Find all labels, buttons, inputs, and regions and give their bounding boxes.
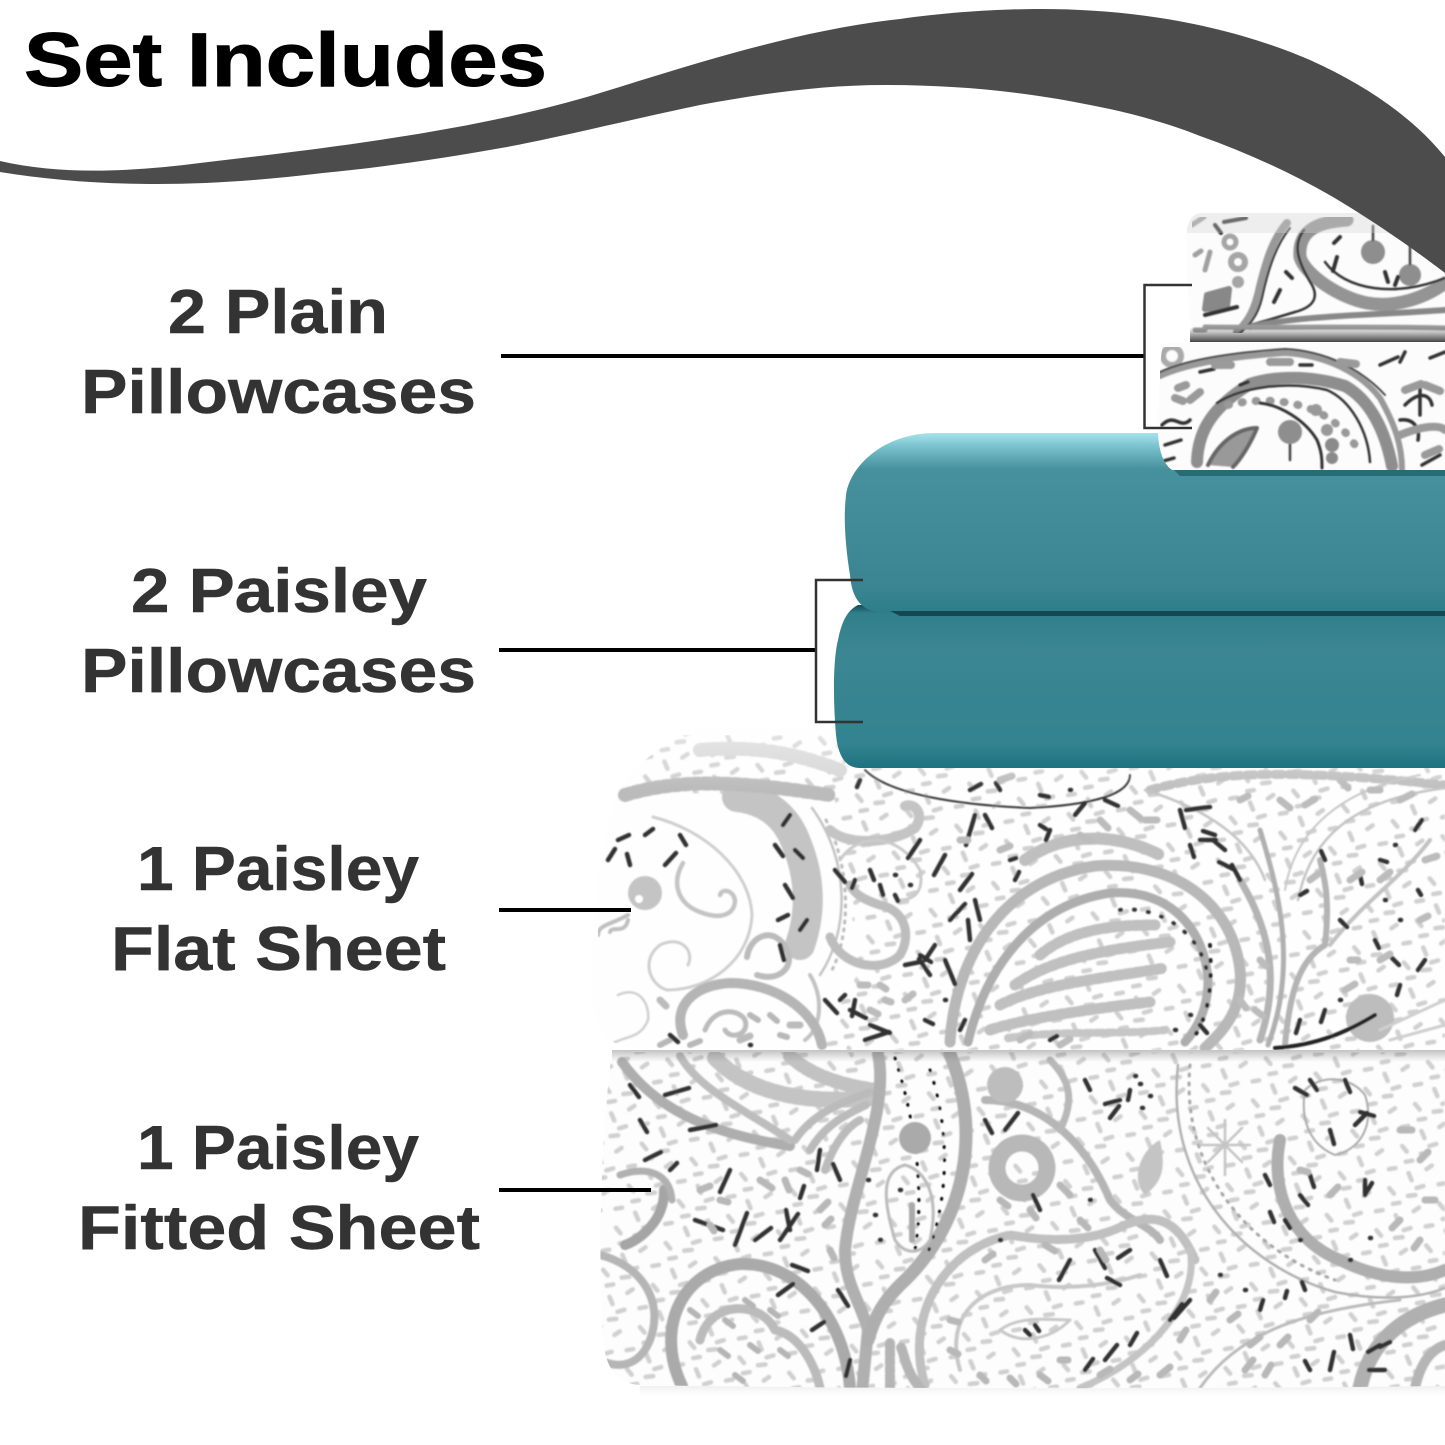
flat sheet	[592, 728, 1445, 1053]
paisley motif: large feather paisley	[950, 839, 1270, 1048]
header swoosh	[0, 9, 1445, 273]
teal pillowcase lower	[834, 605, 1445, 768]
label: 1 paisley flat sheet: Flat Sheet	[111, 915, 446, 984]
label: 1 paisley fitted sheet: 1 Paisley	[137, 1114, 420, 1183]
paisley plain pillowcase upper	[1186, 213, 1445, 342]
label: 2 paisley pillowcases: Pillowcases	[81, 637, 476, 706]
teal pillowcase upper	[845, 433, 1445, 613]
label: 1 paisley flat sheet	[111, 835, 446, 984]
leader line and bracket: paisley pillowcases	[499, 580, 863, 722]
pillow motif: main arc	[1197, 378, 1392, 466]
leader line: flat sheet	[499, 908, 631, 912]
paisley motif: left column band	[598, 797, 846, 1045]
paisley motif: lower-centre scalloped paisley	[890, 1219, 1195, 1388]
black paisley accents	[608, 780, 1425, 1045]
pillow shadow on teal	[1172, 468, 1445, 476]
paisley plain pillowcase lower	[1158, 343, 1445, 470]
paisley motif: central teardrop	[845, 1054, 966, 1392]
fitted sheet	[600, 1052, 1445, 1392]
paisley motif: lower-left paisley	[600, 1171, 850, 1388]
label: 2 paisley pillowcases	[81, 557, 476, 706]
label: 2 paisley pillowcases: 2 Paisley	[131, 557, 428, 626]
paisley motif: upper-left leaf	[622, 1056, 876, 1170]
pillow motif: left band	[1237, 223, 1287, 332]
title: Set Includes	[24, 18, 547, 103]
pillow motif: corner ring	[1163, 347, 1181, 365]
label: 1 paisley fitted sheet: Fitted Sheet	[78, 1194, 480, 1263]
teal fold shadow	[890, 611, 1445, 616]
black paisley accents	[630, 1076, 1390, 1376]
label: 1 paisley flat sheet: 1 Paisley	[137, 835, 420, 904]
label: 2 plain pillowcases	[81, 278, 476, 427]
leader line: fitted sheet	[499, 1188, 651, 1192]
fold shadow between sheets	[612, 1050, 1445, 1062]
label: 2 plain pillowcases: Pillowcases	[81, 358, 476, 427]
label: 1 paisley fitted sheet	[78, 1114, 480, 1263]
paisley motif: right stems	[1260, 775, 1445, 1048]
gray paisley flecks	[700, 1130, 1435, 1384]
paisley motif: centre-left scroll paisley	[660, 805, 921, 1045]
pillow motif: right band	[1300, 220, 1445, 304]
pillow motif: outer band	[1160, 353, 1402, 470]
paisley motif: stems and flowers	[985, 1060, 1163, 1240]
gray paisley flecks	[660, 776, 1437, 1045]
paisley motif: top-face border	[625, 749, 1445, 880]
leader line and bracket: plain pillowcases	[501, 285, 1192, 428]
shadow under the stack	[640, 1386, 1445, 1396]
paisley motif: right medallion	[1177, 1065, 1445, 1388]
label: 2 plain pillowcases: 2 Plain	[168, 278, 388, 347]
